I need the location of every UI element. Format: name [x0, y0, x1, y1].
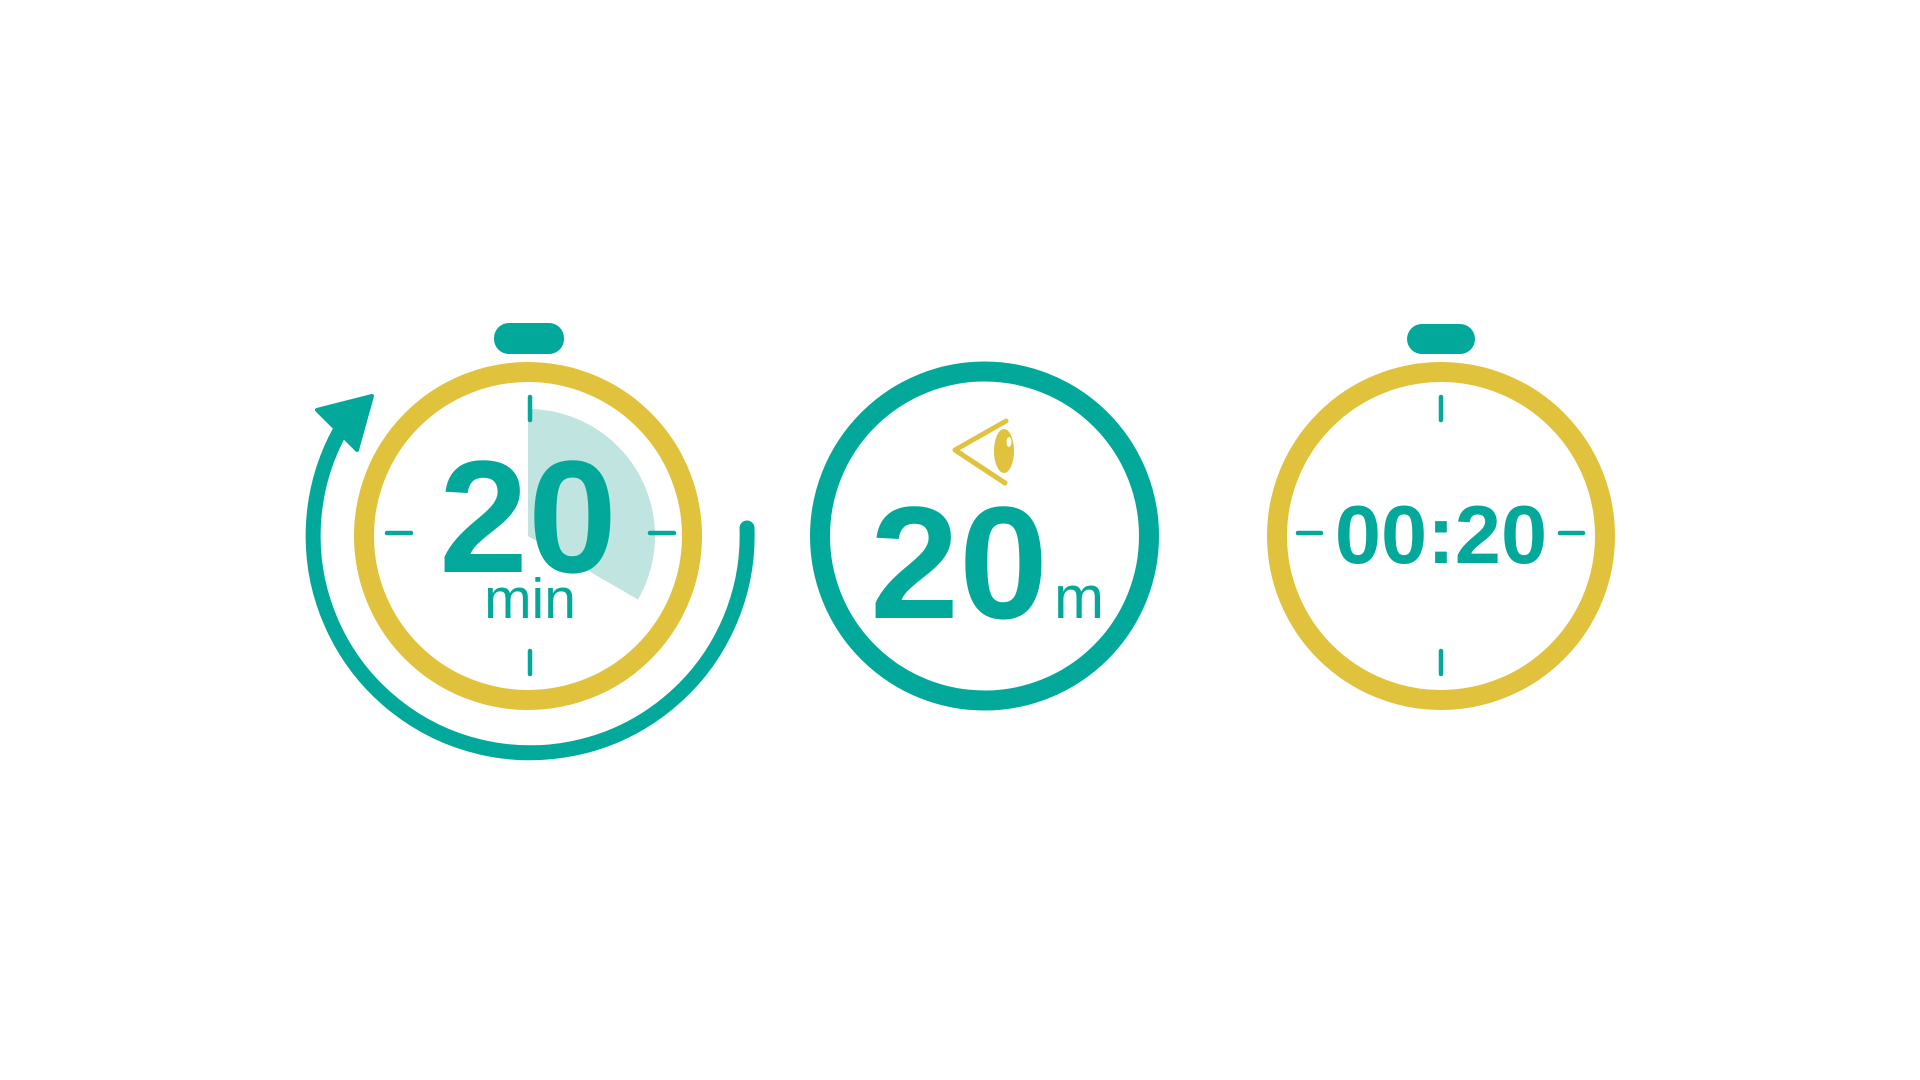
icon: eye [955, 421, 1014, 483]
timer ring [364, 372, 692, 700]
ticks [1298, 397, 1583, 674]
circle [820, 372, 1149, 700]
unit m: m [1054, 564, 1104, 631]
repeat arrow arc [313, 396, 747, 753]
number 20: 20 [439, 427, 617, 606]
ring [1277, 372, 1605, 700]
shaded sector [528, 409, 655, 600]
time text: 00:20 [1335, 488, 1547, 581]
icon: stopwatch 00:20 [1277, 324, 1605, 700]
timer button [494, 323, 564, 354]
button [1407, 324, 1475, 354]
label min: min [484, 567, 576, 631]
icon: timer 20 min with repeat arrow [313, 323, 747, 753]
icon: viewing distance 20 m [820, 372, 1149, 700]
number 20: 20 [870, 473, 1048, 652]
tick marks [387, 397, 674, 674]
